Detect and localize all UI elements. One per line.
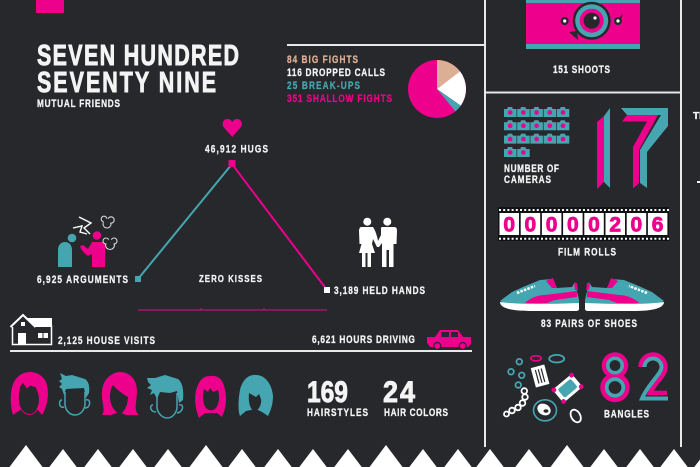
hairstyles stat — [307, 375, 368, 419]
hair colors stat: HAIR COLORS — [384, 407, 448, 419]
hair colors stat: 24 — [383, 376, 415, 409]
number of cameras label: CAMERAS — [504, 174, 551, 186]
icon: house — [10, 315, 52, 345]
triangle chart — [135, 160, 330, 310]
title: MUTUAL FRIENDS — [37, 98, 120, 110]
hugs label: 46,912 HUGS — [205, 143, 268, 156]
hair 3 — [102, 372, 139, 415]
number of cameras label — [504, 163, 559, 186]
fights legend: 25 BREAK-UPS — [287, 80, 360, 92]
title: SEVENTY NINE — [37, 67, 216, 99]
film strip — [498, 207, 669, 241]
film strip: 0 — [503, 214, 515, 236]
zero kisses label: ZERO KISSES — [199, 273, 262, 284]
hairstyle icons — [11, 372, 273, 418]
icon: heart — [223, 119, 242, 137]
title — [37, 40, 239, 110]
hair colors stat — [383, 376, 448, 419]
fights legend — [287, 54, 392, 105]
film strip: 2 — [609, 214, 621, 236]
hair 6 — [238, 375, 273, 416]
fights legend: 84 BIG FIGHTS — [287, 54, 358, 66]
film strip: 6 — [652, 214, 663, 236]
hairstyles stat: HAIRSTYLES — [307, 407, 368, 419]
fights legend: 351 SHALLOW FIGHTS — [287, 93, 392, 105]
big number 82 — [602, 354, 668, 400]
film strip: 0 — [546, 214, 557, 236]
film strip: 0 — [567, 214, 579, 236]
title: SEVEN HUNDRED — [37, 40, 239, 72]
bangles label: BANGLES — [604, 408, 649, 421]
house visits label: 2,125 HOUSE VISITS — [58, 335, 155, 347]
zigzag bottom border — [10, 445, 700, 467]
hours driving label: 6,621 HOURS DRIVING — [312, 334, 415, 346]
icon: pair of shoes — [500, 278, 664, 311]
icon: bangles collection — [504, 355, 585, 424]
hairstyles stat: 169 — [307, 375, 348, 409]
seventeen small cameras — [504, 107, 569, 157]
number of cameras label: NUMBER OF — [504, 163, 559, 175]
hair 2 — [59, 373, 90, 415]
big number 17 — [597, 108, 668, 189]
film strip: 0 — [588, 214, 600, 236]
hair 1 — [11, 372, 48, 415]
hair 4 — [147, 375, 183, 418]
shoes label: 83 PAIRS OF SHOES — [541, 318, 637, 330]
held hands label: 3,189 HELD HANDS — [334, 285, 425, 297]
arguments label: 6,925 ARGUMENTS — [37, 274, 128, 286]
pink square marker — [36, 0, 64, 13]
clipped text at right edge — [693, 111, 700, 183]
film rolls label: FILM ROLLS — [558, 246, 616, 259]
film strip: 0 — [631, 214, 642, 236]
icon: couple holding hands — [359, 218, 397, 267]
film strip: 0 — [525, 214, 536, 236]
icon: arguing people — [58, 216, 117, 267]
shoots label: 151 SHOOTS — [553, 64, 610, 76]
hair 5 — [195, 376, 226, 418]
icon: camera — [526, 0, 640, 49]
fights legend: 116 DROPPED CALLS — [287, 67, 385, 79]
icon: car — [427, 330, 471, 350]
pie chart — [408, 60, 466, 118]
